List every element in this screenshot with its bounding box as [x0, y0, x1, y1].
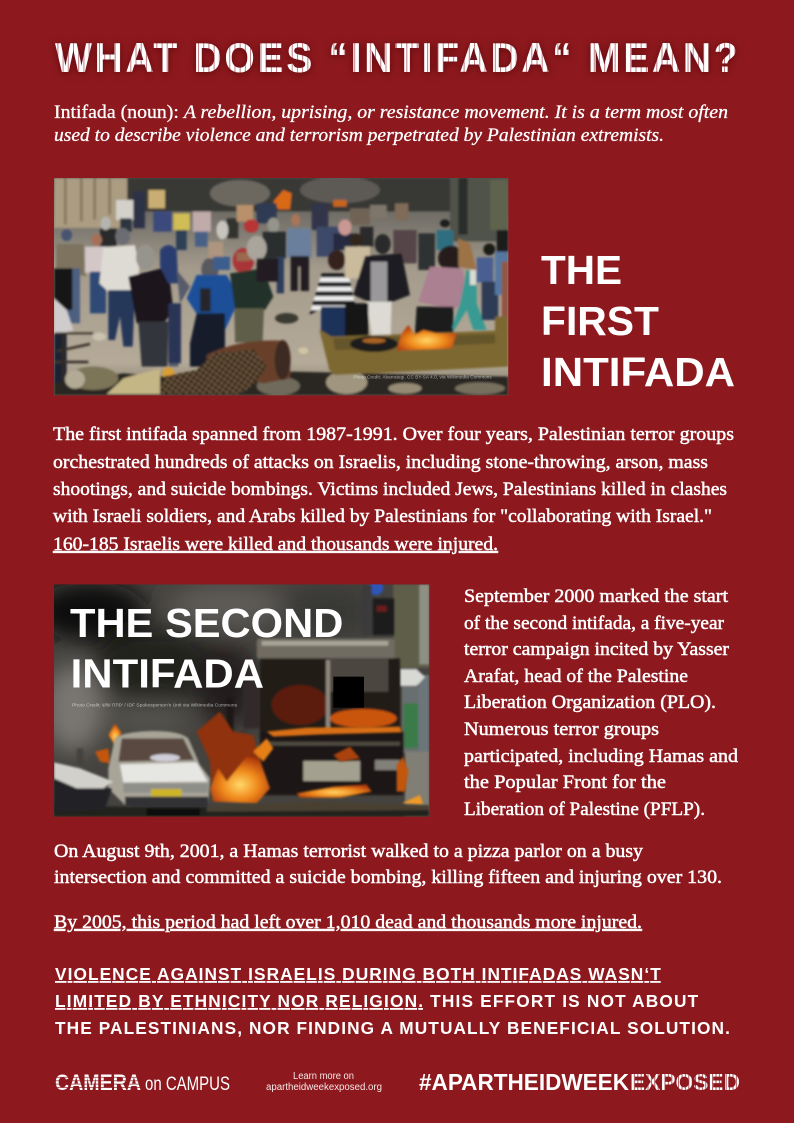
- heading: the first intifada: FIRST: [541, 298, 659, 344]
- burning bus: [227, 638, 403, 795]
- paragraph: second intifada: September 2000 marked the start: [464, 586, 729, 607]
- paragraph: first intifada: 160-185 Israelis were killed and thousands were injured.: [53, 534, 498, 555]
- figure: woman in blue jacket: [187, 258, 240, 367]
- heading: the second intifada: THE SECOND: [70, 600, 343, 646]
- heading: the first intifada: [541, 247, 735, 395]
- paragraph: first intifada: [53, 424, 734, 555]
- paragraph: second intifada: the Popular Front for the: [464, 772, 666, 793]
- photo: second intifada burning bus: [33, 580, 429, 817]
- paragraph: first intifada: orchestrated hundreds of attacks on Israelis, including stone-throwing, arson, mass: [53, 452, 708, 473]
- footer logo: camera on campus: [55, 1070, 230, 1095]
- paragraph: pizza parlor bombing: [54, 841, 722, 888]
- paragraph: second intifada: Arafat, head of the Palestine: [464, 666, 688, 687]
- figure: far left jacket man: [56, 229, 86, 323]
- paragraph: pizza parlor bombing: On August 9th, 2001, a Hamas terrorist walked to a pizza parlor on a busy: [54, 841, 644, 862]
- paragraph: second intifada: [464, 586, 739, 820]
- rusted barrel: [207, 340, 291, 383]
- paragraph: second intifada: of the second intifada, a five-year: [464, 613, 725, 634]
- paragraph: second intifada: Numerous terror groups: [464, 719, 659, 740]
- photo credit: Photo Credit: Abarrategi, CC BY-SA 4.0, via Wikimedia Commons: [353, 374, 492, 379]
- conclusion statement: LIMITED BY ETHNICITY NOR RELIGION. THIS EFFORT IS NOT ABOUT: [55, 991, 698, 1011]
- paragraph: pizza parlor bombing: intersection and committed a suicide bombing, killing fifteen and injuring over 130.: [54, 867, 722, 888]
- figure: man in cream: [345, 233, 370, 278]
- paragraph: first intifada: shootings, and suicide bombings. Victims included Jews, Palestinians killed in clashes: [53, 479, 727, 500]
- conclusion statement: THE PALESTINIANS, NOR FINDING A MUTUALLY BENEFICIAL SOLUTION.: [55, 1018, 730, 1038]
- figure: man in grey sweater: [287, 214, 312, 292]
- footer link: apartheidweekexposed.org: [266, 1082, 382, 1093]
- foreground rubble strip: [54, 367, 508, 395]
- figure: red scarf man: [230, 248, 273, 343]
- fire: [95, 712, 423, 805]
- heading: the second intifada: INTIFADA: [71, 650, 264, 696]
- wooden trough with burning tire: [319, 317, 508, 375]
- footer link: [266, 1071, 382, 1093]
- photo credit: Photo Credit: יפתח ש/ש / IDF Spokesperson's Unit via Wikimedia Commons: [72, 703, 238, 709]
- footer hashtag: #APARTHEIDWEEK: [419, 1069, 629, 1095]
- figure: man in white jacket: [99, 228, 139, 347]
- photo: first intifada street crowd: [54, 177, 508, 395]
- figure: left edge people: [54, 268, 73, 387]
- footer hashtag: [419, 1069, 740, 1095]
- paragraph: second intifada: Liberation of Palestine (PFLP).: [464, 799, 705, 820]
- silver car: [108, 731, 210, 807]
- traffic light and sign: [362, 580, 394, 635]
- figure: headscarf man behind: [208, 236, 278, 282]
- paragraph: second intifada: Liberation Organization (PLO).: [464, 692, 716, 713]
- footer link: Learn more on: [293, 1071, 354, 1082]
- road: [54, 802, 429, 817]
- smoke: [33, 582, 370, 752]
- figure: blue hooded man: [160, 245, 190, 367]
- paragraph: first intifada: with Israeli soldiers, and Arabs killed by Palestinians for "collaborating with Israel.": [53, 506, 712, 527]
- figure: teal trousers person: [452, 238, 487, 332]
- distant crowd: [100, 177, 508, 270]
- footer hashtag: EXPOSED: [630, 1069, 740, 1095]
- figure: masked man in black jacket: [345, 234, 410, 337]
- heading: the second intifada: [70, 608, 342, 688]
- wrecked car at left: [54, 748, 113, 812]
- footer logo: camera on campus: CAMERA: [55, 1070, 141, 1095]
- background street right side: [393, 584, 429, 817]
- blacked out square: [333, 677, 364, 708]
- definition text: Intifada (noun): A rebellion, uprising, or resistance movement. It is a term most often: [54, 102, 728, 123]
- figure: woman in pink shirt: [415, 246, 470, 333]
- debris on road: [55, 313, 308, 383]
- figure: masked man in black shirt: [128, 245, 173, 367]
- figure: boy in striped sweater: [309, 250, 357, 337]
- paragraph: second intifada: terror campaign incited by Yasser: [464, 639, 730, 660]
- paragraph: second intifada: participated, including Hamas and: [464, 746, 739, 767]
- heading: the first intifada: INTIFADA: [541, 349, 735, 395]
- conclusion statement: [55, 964, 730, 1038]
- conclusion statement: VIOLENCE AGAINST ISRAELIS DURING BOTH INTIFADAS WASN‘T: [55, 964, 661, 984]
- heading: the first intifada: THE: [541, 247, 622, 293]
- definition text: used to describe violence and terrorism perpetrated by Palestinian extremists.: [54, 125, 664, 146]
- footer logo: camera on campus: on CAMPUS: [145, 1074, 230, 1095]
- figure: boy in white: [85, 234, 106, 313]
- title: WHAT DOES “INTIFADA“ MEAN?: [55, 34, 738, 81]
- figure: right edge people: [477, 230, 508, 320]
- paragraph: first intifada: The first intifada spanned from 1987-1991. Over four years, Palestinian terror groups: [53, 424, 734, 445]
- figure: dark coat man: [263, 218, 286, 293]
- wire grate: [160, 349, 267, 394]
- underlined death toll: By 2005, this period had left over 1,010 dead and thousands more injured.: [54, 912, 642, 933]
- building columns: [54, 178, 127, 228]
- definition text: [54, 102, 728, 146]
